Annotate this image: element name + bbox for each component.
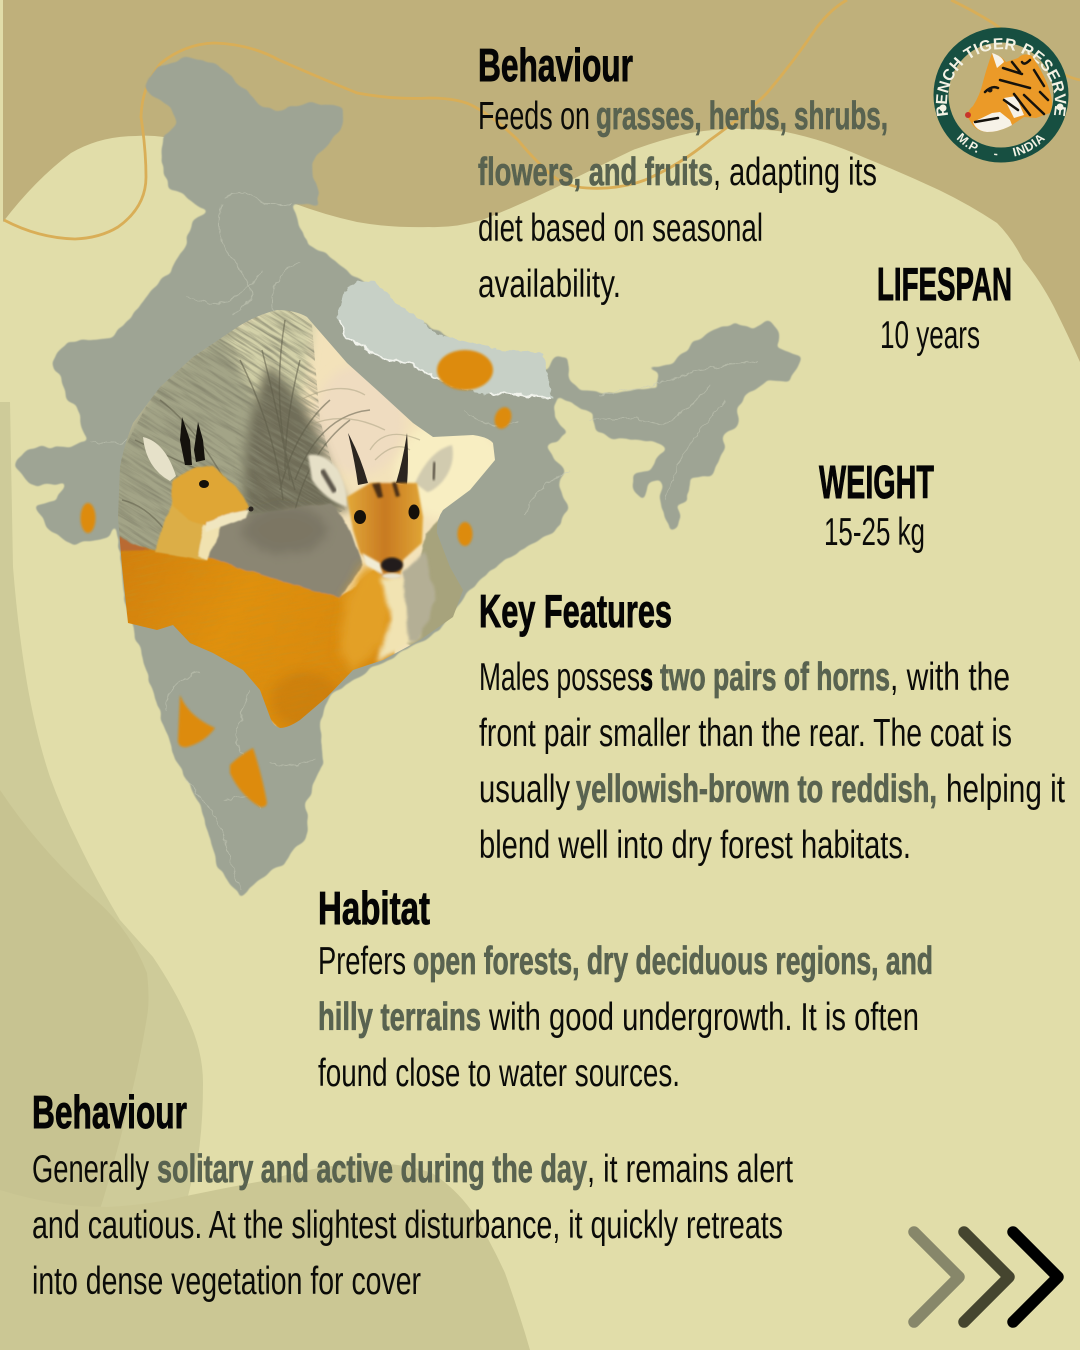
text block: key features: s (640, 656, 653, 699)
text block: bottom behaviour: Generally (32, 1148, 149, 1191)
neck and chest (340, 565, 395, 672)
text block: lifespan (877, 258, 1012, 357)
logo dots (940, 104, 946, 112)
palm frond strokes (122, 320, 370, 530)
text block: bottom behaviour: into dense vegetation for cover (32, 1260, 421, 1303)
arrows: next chevrons (914, 1232, 1058, 1322)
map landmass (15, 58, 802, 897)
logo tiger stripes (975, 60, 1048, 122)
small antelope eye (199, 480, 209, 488)
palm foliage left (118, 326, 278, 551)
range patch: small east (492, 405, 514, 431)
main antelope nose (381, 558, 403, 572)
text block: key features: yellowish-brown to reddish, (576, 768, 937, 811)
logo: Pench Tiger Reserve (934, 28, 1068, 162)
palm frond dark centre (244, 365, 350, 515)
logo ring (941, 35, 1061, 155)
main antelope horns (348, 433, 408, 485)
background shape: left blob (0, 402, 203, 1350)
small antelope muzzle (207, 510, 250, 532)
range patch: Western Ghats north (178, 695, 215, 747)
text block: key features: , with the (890, 656, 1010, 699)
text block: top behaviour: availability. (478, 263, 621, 306)
range patch: Gujarat (80, 503, 96, 533)
text block: top behaviour: diet based on seasonal (478, 207, 763, 250)
body lines: Feeds on (478, 95, 590, 138)
background shape: inner left blob (0, 790, 148, 1350)
text block: habitat: with good undergrowth. It is often (488, 996, 919, 1039)
main antelope ear right (415, 445, 453, 492)
text block: weight: 15-25 kg (824, 511, 925, 554)
antelope illustration (118, 310, 495, 728)
painting backdrop (128, 311, 494, 728)
text block: top behaviour: flowers, and fruits (478, 151, 713, 194)
main antelope ear left (308, 455, 347, 507)
range patch: north oval (437, 350, 493, 390)
faint branches on backdrop (300, 389, 420, 460)
text block: top behaviour (478, 39, 888, 306)
text block: key features: Males posses (479, 656, 640, 699)
decorative gold line (4, 0, 847, 239)
logo tiger muzzle (973, 53, 1024, 132)
text block: bottom behaviour: and cautious. At the slightest disturbance, it quickly retreats (32, 1204, 783, 1247)
range patch: Western Ghats south (230, 748, 267, 807)
text block: habitat (318, 882, 933, 1095)
Nepal region (337, 280, 552, 398)
text block: top behaviour: grasses, herbs, shrubs, (596, 95, 888, 138)
Nepal white edge (340, 320, 550, 398)
orange range patches (80, 350, 514, 807)
heading: Behaviour: Behaviour (478, 39, 633, 91)
palm fibre texture (118, 310, 345, 549)
text block: top behaviour: , adapting its (713, 151, 877, 194)
background shape: top tan wave (3, 0, 1080, 362)
chevron light (914, 1232, 959, 1322)
background shape: bottom wave (0, 1163, 530, 1350)
grey fur rump (205, 503, 362, 600)
main antelope white cheek (362, 553, 383, 575)
text block: habitat: Habitat (318, 882, 430, 934)
text block: habitat: found close to water sources. (318, 1052, 680, 1095)
decorative gold line right (951, 0, 1080, 80)
main antelope eyes (354, 510, 366, 524)
orange body (120, 546, 396, 728)
text block: weight (819, 456, 934, 554)
range patch: east coast (458, 522, 472, 546)
grass right (406, 520, 463, 646)
body fur texture (188, 568, 354, 724)
map state borders (90, 193, 758, 890)
small antelope head (172, 465, 250, 526)
map of India (15, 58, 802, 897)
text block: bottom behaviour: solitary and active during the day (157, 1148, 587, 1191)
text block: lifespan: 10 years (880, 314, 980, 357)
main antelope face (347, 483, 423, 577)
text block: habitat: hilly terrains (318, 996, 481, 1039)
text block: key features: two pairs of horns (660, 656, 890, 699)
main antelope forehead tufts (372, 482, 400, 498)
text block: habitat: Prefers (318, 940, 406, 983)
small antelope neck (154, 502, 206, 561)
logo ring text top: PENCH TIGER RESERVE (936, 38, 1066, 116)
logo ring text bottom: M.P. - INDIA (956, 132, 1046, 156)
small antelope horns (180, 417, 205, 465)
chevron mid (964, 1232, 1009, 1322)
text block: key features: Key Features (479, 585, 672, 637)
text block: bottom behaviour (32, 1086, 793, 1303)
logo tiger head (967, 53, 1052, 132)
palm foliage top (221, 310, 316, 402)
text block: weight: WEIGHT (819, 456, 934, 508)
text block: key features: blend well into dry forest habitats. (479, 824, 911, 867)
text block: bottom behaviour: , it remains alert (587, 1148, 793, 1191)
text block: key features: usually (479, 768, 570, 811)
chevron dark (1013, 1232, 1058, 1322)
text block: key features (479, 585, 1065, 867)
small antelope ear (143, 437, 176, 481)
text block: bottom behaviour: Behaviour (32, 1086, 187, 1138)
